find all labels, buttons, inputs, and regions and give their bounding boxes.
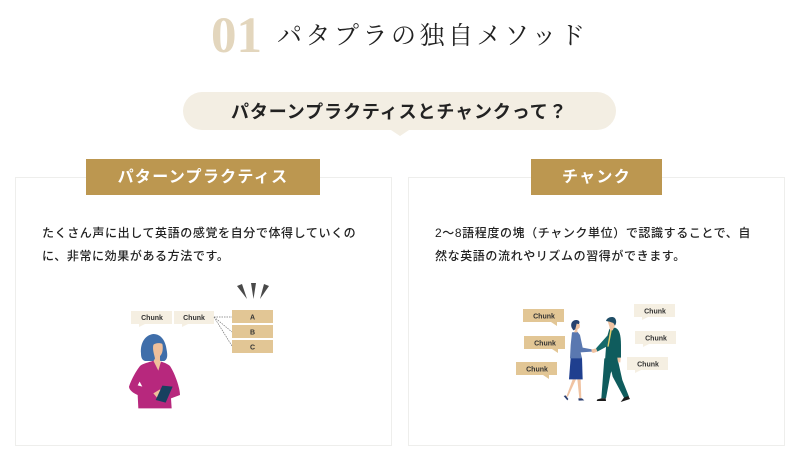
text: chunk description: 然な英語の流れやリズムの習得ができます。 [435,249,686,263]
text: pattern practice description: に、非常に効果がある方法です。 [42,249,229,263]
chunk bubble 1: Chunk [141,315,163,322]
pill pointer [391,130,409,136]
chunk bubble left 1 [523,309,564,326]
text: chunk description [435,226,751,263]
chunk bubble left 2 [524,336,565,353]
panel: chunk [408,177,785,446]
tab heading: chunk: チャンク [562,169,631,186]
tab heading: chunk [531,159,662,195]
chunk bubble right 1 [634,304,675,320]
tab heading: pattern practice: パターンプラクティス [118,169,288,186]
chunk bubble left 3 [516,362,557,379]
chunk bubble right 2 [635,331,676,347]
chunk bubble right 1: Chunk [644,308,666,316]
text: chunk description: 2～8語程度の塊（チャンク単位）で認識することで、自 [435,226,751,240]
illustration: people shaking hands with chunks [516,304,676,402]
chunk bubble 1 [131,311,172,327]
illustration: woman with chunks [129,283,273,408]
dashed connectors [214,317,232,346]
chunk bubble left 3: Chunk [526,366,548,374]
section number: 01 [211,8,262,64]
option box A: A [250,314,255,322]
text: pattern practice description [42,226,356,263]
chunk bubble 2 [174,311,214,327]
chunk bubble right 3 [627,357,668,373]
figure: man in suit [591,317,630,402]
chunk bubble right 2: Chunk [645,336,667,342]
option box C: C [250,344,255,352]
chunk bubble left 2: Chunk [534,340,556,348]
tab heading: pattern practice [86,159,320,195]
option box B [232,325,273,338]
chunk bubble left 1: Chunk [533,314,555,320]
pill background [183,92,616,130]
figure: woman in suit [564,320,595,401]
option box B: B [250,330,255,336]
text: pattern practice description: たくさん声に出して英語の感覚を自分で体得していくの [42,226,356,240]
title: パタプラの独自メソッド [277,23,589,50]
question heading pill [183,92,616,136]
figure: woman [129,334,180,408]
panel: pattern practice [15,177,392,446]
option box C [232,340,273,353]
icon: emphasis spikes [237,283,269,299]
option box A [232,310,273,323]
chunk bubble right 3: Chunk [637,362,659,368]
pill text: パターンプラクティスとチャンクって？ [231,102,568,122]
chunk bubble 2: Chunk [183,315,205,322]
